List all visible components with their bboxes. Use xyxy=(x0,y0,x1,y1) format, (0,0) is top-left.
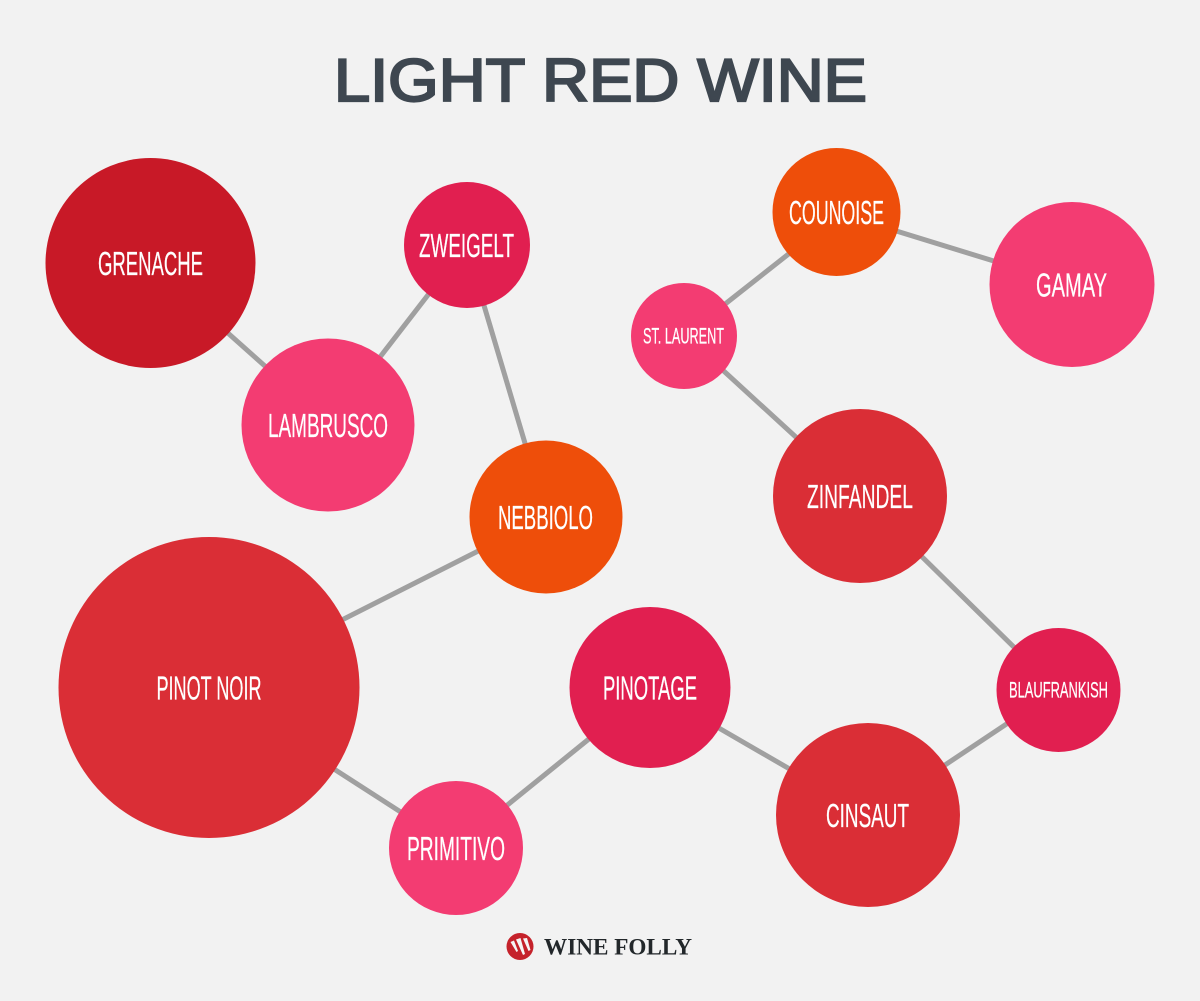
node: Lambrusco: LAMBRUSCO xyxy=(268,408,388,445)
node: Pinotage xyxy=(570,607,730,768)
node: Pinot Noir xyxy=(58,537,360,838)
node: Zinfandel: ZINFANDEL xyxy=(807,479,913,516)
wordmark: WINE FOLLY xyxy=(544,934,692,960)
node: Counoise: COUNOISE xyxy=(789,195,884,232)
node: Zweigelt xyxy=(404,182,530,308)
node: Cinsaut: CINSAUT xyxy=(826,798,909,835)
node: Blaufrankish xyxy=(996,628,1120,752)
node: Blaufrankish: BLAUFRANKISH xyxy=(1009,678,1108,702)
node: St. Laurent xyxy=(631,283,737,389)
line: Zinfandel to St. Laurent xyxy=(715,363,810,450)
line: Pinot Noir to Primitivo xyxy=(320,760,410,818)
line: Nebbiolo to Pinot Noir xyxy=(330,540,500,626)
icon: bottle badge xyxy=(506,933,534,960)
node: Primitivo: PRIMITIVO xyxy=(407,831,505,868)
line: Blaufrankish to Zinfandel xyxy=(910,545,1025,658)
title: LIGHT RED WINE xyxy=(334,47,867,114)
node: Lambrusco xyxy=(242,338,414,512)
node: Grenache: GRENACHE xyxy=(98,246,203,283)
line: Lambrusco to Zweigelt xyxy=(370,282,438,370)
line: Cinsaut to Blaufrankish xyxy=(930,715,1020,775)
line: Primitivo to Pinotage xyxy=(495,730,600,815)
node: Nebbiolo: NEBBIOLO xyxy=(498,500,593,537)
line: St. Laurent to Counoise xyxy=(715,245,800,312)
logo: Wine Folly xyxy=(506,933,692,960)
line: Pinotage to Cinsaut xyxy=(705,720,800,775)
node: Primitivo xyxy=(389,781,523,915)
line: Grenache to Lambrusco xyxy=(220,326,275,375)
node: Gamay: GAMAY xyxy=(1036,268,1107,304)
node: Zweigelt: ZWEIGELT xyxy=(419,228,514,265)
connector lines xyxy=(220,226,1025,818)
line: Zweigelt to Nebbiolo xyxy=(480,292,530,460)
node: Counoise xyxy=(772,148,900,276)
node: Grenache xyxy=(46,158,256,368)
node: St. Laurent: ST. LAURENT xyxy=(643,324,724,348)
node: Zinfandel xyxy=(773,409,947,583)
line: Counoise to Gamay xyxy=(880,226,1010,266)
node: Nebbiolo xyxy=(470,440,622,594)
node: Cinsaut xyxy=(776,723,960,907)
node: Pinot Noir: PINOT NOIR xyxy=(156,670,262,708)
node: Gamay xyxy=(990,202,1154,367)
node: Pinotage: PINOTAGE xyxy=(603,670,697,708)
